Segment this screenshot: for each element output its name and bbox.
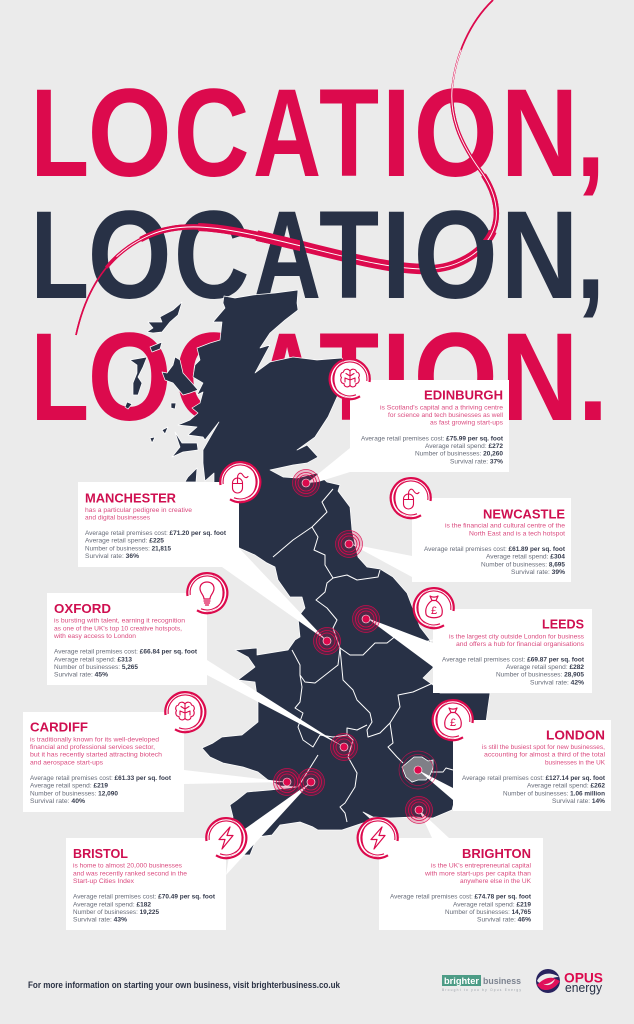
panel: Newcastle: is the financial and cultural centre of the <box>445 523 565 530</box>
icon: Newcastle mouse <box>391 478 431 518</box>
title line 2: LOCATION,: C <box>174 186 250 325</box>
panel: Cardiff: Average retail premises cost: £61.33 per sq. foot <box>30 775 172 782</box>
footer note: For more information on starting your own business, visit brighterbusiness.co.uk <box>28 979 341 990</box>
title line 3: LOCATION. <box>31 306 608 447</box>
panel: Cardiff: Number of businesses: 12,090 <box>30 790 118 797</box>
panel: Leeds: is the largest city outside London for business <box>449 633 585 640</box>
panel: Leeds: and offers a hub for financial organisations <box>456 641 585 648</box>
panel: Bristol: Number of businesses: 19,225 <box>73 909 159 916</box>
panel: Edinburgh: for science and tech businesses as well <box>388 412 503 419</box>
title line 3: LOCATION.: C <box>174 308 250 447</box>
title line 1: LOCATION,: , <box>576 64 605 203</box>
panel: Edinburgh: Survival rate: 37% <box>450 458 503 465</box>
panel: Oxford: with easy access to London <box>53 633 136 640</box>
title line 1: LOCATION, <box>31 62 605 203</box>
title line 2: LOCATION,: L <box>31 185 89 325</box>
marker: Brighton <box>405 796 433 824</box>
panel: Edinburgh: is Scotland's capital and a thriving centre <box>380 404 503 412</box>
marker: Cardiff <box>273 768 301 796</box>
title line 1: LOCATION,: A <box>253 64 321 203</box>
title line 2: LOCATION,: , <box>576 186 605 325</box>
marker: Oxford <box>330 733 358 761</box>
panel: Cardiff: is traditionally known for its well-developed <box>30 736 159 743</box>
panel: Manchester: Number of businesses: 21,815 <box>85 545 171 552</box>
panel: Brighton: Survival rate: 46% <box>477 917 531 924</box>
icon: Oxford light bulb <box>187 573 227 613</box>
map of Great Britain <box>125 290 490 855</box>
swoosh ribbon (behind second line) <box>76 0 496 335</box>
panel: Newcastle: Average retail spend: £304 <box>486 554 565 561</box>
title line 3: LOCATION.: I <box>382 308 411 447</box>
panel: Bristol: Average retail premises cost: £70.49 per sq. foot <box>73 894 216 901</box>
panel: Leeds: Number of businesses: 28,905 <box>496 672 584 679</box>
panel: Cardiff: Survival rate: 40% <box>30 798 85 805</box>
icon: Manchester mouse <box>220 462 260 502</box>
London boundary blob <box>402 757 433 782</box>
panel: Edinburgh <box>350 380 509 472</box>
icon: Brighton lightning bolt <box>358 818 398 858</box>
marker: Manchester <box>313 627 341 655</box>
panel: London: is still the busiest spot for new businesses, <box>482 744 605 751</box>
panel: Bristol: BRISTOL <box>73 846 128 861</box>
icon: London money bag <box>433 700 473 740</box>
panel: Leeds: LEEDS <box>542 617 584 632</box>
title line 2: LOCATION,: I <box>382 186 411 325</box>
logo: Opus Energy <box>536 969 603 995</box>
icon: London money bag: £ <box>450 717 456 729</box>
title line 2: LOCATION,: T <box>319 185 379 325</box>
panel: Edinburgh: Average retail premises cost: £75.99 per sq. foot <box>361 435 504 442</box>
icon: Leeds money bag <box>414 588 454 628</box>
logo: brighter business <box>442 975 521 992</box>
title line 3: LOCATION.: L <box>31 307 89 447</box>
panel: Leeds: Average retail spend: £282 <box>506 664 584 671</box>
panel: Cardiff: CARDIFF <box>30 720 88 735</box>
title line 3: LOCATION.: A <box>253 308 321 447</box>
panel: Edinburgh: as fast growing start-ups <box>430 420 504 427</box>
logo: brighter business: brighter <box>444 976 479 987</box>
panel: Newcastle: Average retail premises cost: £61.89 per sq. foot <box>424 546 566 553</box>
panel: Brighton <box>379 838 543 930</box>
title line 3: LOCATION.: O <box>88 307 172 447</box>
panel: Bristol: Survival rate: 43% <box>73 917 127 924</box>
panel: Manchester: has a particular pedigree in creative <box>85 507 192 514</box>
marker: Edinburgh <box>292 469 320 497</box>
panel: Manchester: MANCHESTER <box>85 490 177 505</box>
panel: Bristol: and was recently ranked second in the <box>73 870 187 877</box>
panel: Brighton: with more start-ups per capita than <box>424 870 531 877</box>
title line 2: LOCATION,: O <box>414 185 498 325</box>
panel: Brighton: anywhere else in the UK <box>460 878 531 885</box>
icon: Edinburgh brain <box>330 359 370 399</box>
icon: Cardiff brain <box>165 692 205 732</box>
marker: Leeds <box>352 605 380 633</box>
title line 1: LOCATION,: I <box>382 64 411 203</box>
title line 1: LOCATION,: O <box>88 63 172 203</box>
panel: Bristol: is home to almost 20,000 businesses <box>73 863 183 870</box>
panel: Leeds: Survival rate: 42% <box>530 679 584 686</box>
panel: Manchester: Average retail spend: £225 <box>85 538 164 545</box>
panel: Oxford: Average retail spend: £313 <box>54 656 132 663</box>
title line 1: LOCATION,: C <box>174 64 250 203</box>
panel: Bristol: Average retail spend: £182 <box>73 901 151 908</box>
title line 3: LOCATION.: T <box>319 307 379 447</box>
panel: Newcastle: NEWCASTLE <box>483 506 565 521</box>
title line 1: LOCATION,: O <box>414 63 498 203</box>
panel: London: LONDON <box>546 727 605 742</box>
panel: London: Number of businesses: 1.06 million <box>503 790 605 797</box>
panel: Oxford <box>47 593 207 685</box>
region borders <box>273 489 453 822</box>
title line 2: LOCATION,: A <box>253 186 321 325</box>
panel: London: Average retail spend: £262 <box>527 783 605 790</box>
panel: Brighton: is the UK's entrepreneurial capital <box>431 863 531 870</box>
swoosh ribbon (in front of letters) <box>76 0 496 335</box>
panel: Oxford: Average retail premises cost: £66.84 per sq. foot <box>54 649 198 656</box>
panel: Manchester <box>78 482 239 567</box>
logo: brighter business: Brought to you by Opus Energy <box>442 988 521 992</box>
panel: Bristol <box>66 838 226 930</box>
title line 1: LOCATION,: L <box>31 63 89 203</box>
panel: Cardiff: but it has recently started attracting biotech <box>30 752 162 759</box>
panel: Manchester: and digital businesses <box>85 515 151 522</box>
panel: Newcastle: North East and is a tech hotspot <box>469 530 565 537</box>
title line 3: LOCATION.: . <box>578 308 608 447</box>
panel: Edinburgh: Average retail spend: £272 <box>425 443 503 450</box>
panel: Edinburgh: EDINBURGH <box>424 387 503 402</box>
title line 2: LOCATION, <box>31 184 605 325</box>
icon: Leeds money bag: £ <box>431 605 437 617</box>
panel: Brighton: BRIGHTON <box>462 846 531 861</box>
title line 1: LOCATION,: T <box>319 63 379 203</box>
panel: Leeds: Average retail premises cost: £69.87 per sq. foot <box>442 656 585 663</box>
title line 1: LOCATION,: N <box>501 62 578 203</box>
panel: Cardiff: and aerospace start-ups <box>30 759 104 766</box>
marker: London <box>399 751 437 789</box>
panel: Newcastle: Survival rate: 39% <box>511 569 565 576</box>
panel: Edinburgh: Number of businesses: 20,260 <box>415 451 503 458</box>
title line 2: LOCATION,: N <box>501 184 578 325</box>
panel: Oxford: as one of the UK's top 10 creative hotspots, <box>54 625 182 632</box>
panel: Cardiff <box>23 712 184 812</box>
logo: Opus Energy: OPUS <box>564 970 603 986</box>
panel: Oxford: OXFORD <box>54 601 111 616</box>
callout pointers <box>184 448 453 875</box>
title line 3: LOCATION.: N <box>501 306 578 447</box>
logo: brighter business: business <box>483 976 521 987</box>
panel: Leeds <box>433 609 592 693</box>
panel: London <box>453 720 611 811</box>
panel: London: accounting for almost a third of the total <box>484 752 605 759</box>
panel: London: Average retail premises cost: £127.14 per sq. foot <box>462 775 606 782</box>
panel: Oxford: Survival rate: 45% <box>54 672 108 679</box>
panel: Oxford: Number of businesses: 5,265 <box>54 664 138 671</box>
panel: Bristol: Start-up Cities Index <box>73 878 135 885</box>
panel: London: businesses in the UK <box>545 759 605 766</box>
panel: Newcastle: Number of businesses: 8,695 <box>481 561 565 568</box>
panel: Manchester: Average retail premises cost: £71.20 per sq. foot <box>85 530 227 537</box>
panel: London: Survival rate: 14% <box>552 798 605 805</box>
panel: Brighton: Average retail premises cost: £74.78 per sq. foot <box>390 894 532 901</box>
panel: Brighton: Number of businesses: 14,765 <box>445 909 531 916</box>
panel: Brighton: Average retail spend: £219 <box>453 901 531 908</box>
title line 2: LOCATION,: O <box>88 185 172 325</box>
panel: Cardiff: Average retail spend: £219 <box>30 783 108 790</box>
marker: Bristol <box>297 768 325 796</box>
panel: Cardiff: financial and professional services sector, <box>30 744 155 751</box>
logo: Opus Energy: energy <box>565 980 602 995</box>
panel: Oxford: is bursting with talent, earning it recognition <box>54 618 185 625</box>
title line 3: LOCATION.: O <box>414 307 498 447</box>
marker: Newcastle <box>335 530 363 558</box>
icon: Bristol lightning bolt <box>206 818 246 858</box>
panel: Newcastle <box>412 498 571 582</box>
panel: Manchester: Survival rate: 36% <box>85 553 139 560</box>
